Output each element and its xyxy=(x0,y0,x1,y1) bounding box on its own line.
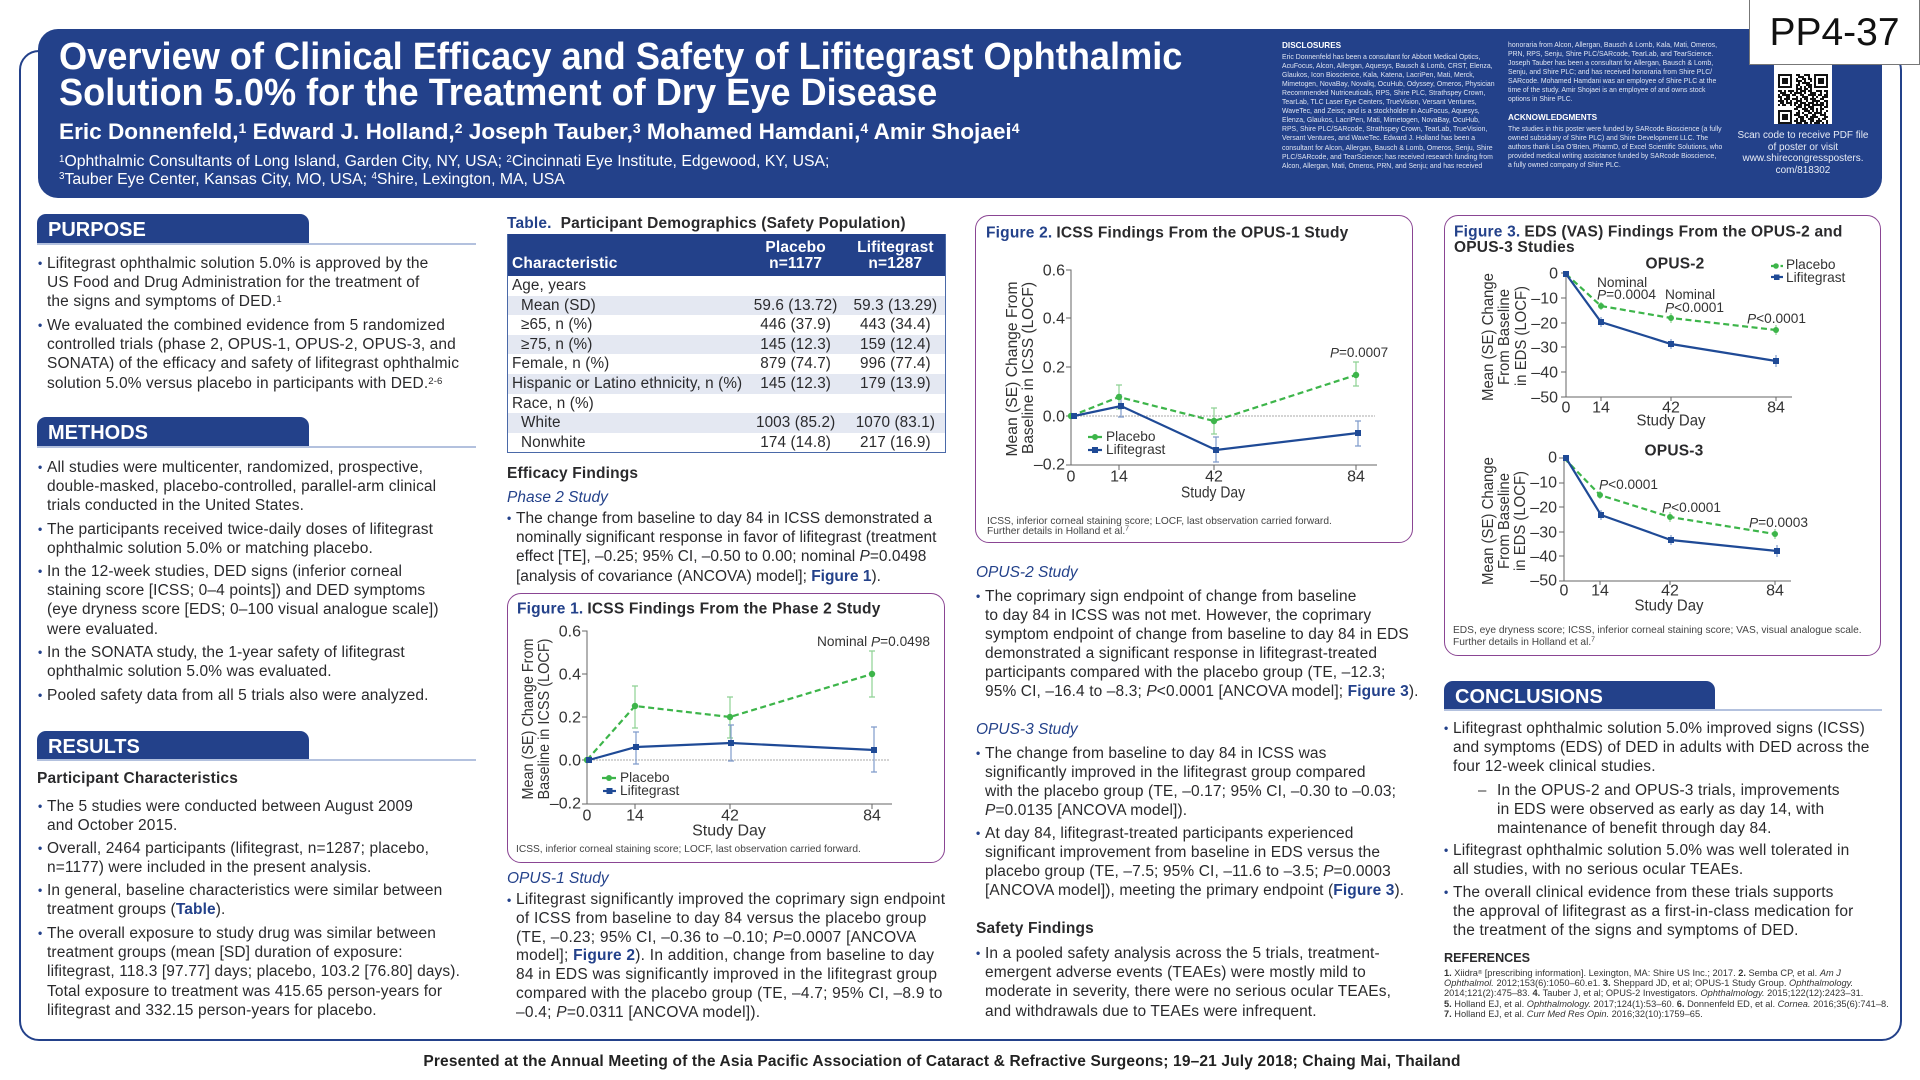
figure 2 line chart: 84 xyxy=(1348,469,1365,486)
opus-1 text xyxy=(507,891,945,1021)
figure 1 line chart: 0.2 xyxy=(559,710,582,727)
disclosures: RPS, Shire PLC/SARcode, Strathspey Crown, TearLab, TrueVision, xyxy=(1282,126,1487,133)
conclusions text: The overall clinical evidence from these trials supports xyxy=(1453,884,1834,901)
acknowledgments: ACKNOWLEDGMENTS The studies in this poster were funded by SARcode Bioscience (a fully xyxy=(1508,113,1722,133)
demographics table: 59.6 (13.72) xyxy=(754,297,837,314)
chart: OPUS-2: From Baseline xyxy=(1497,289,1514,385)
disclosures: AcuFocus, Alcon, Allergan, Aquesys, Bausch & Lomb, CRST, Elenza, xyxy=(1282,63,1493,70)
results text: and October 2015. xyxy=(47,817,177,834)
footer conference line: Presented at the Annual Meeting of the Asia Pacific Association of Cataract & Refractive Surgeons; 19–21 July 2018; Chaing Mai, Thailand xyxy=(423,1053,1461,1070)
panel: figure 3: Further details in Holland et al. xyxy=(1453,638,1592,649)
purpose text: • xyxy=(38,256,42,270)
opus-1 text: compared with the placebo group (TE, –4.7; 95% CI, –8.9 to xyxy=(516,985,943,1002)
chart: OPUS-2: Nominal xyxy=(1597,276,1648,291)
conclusions text: four 12-week clinical studies. xyxy=(1453,758,1656,775)
scan text: www.shirecongressposters. xyxy=(1743,153,1863,164)
results text: n=1177) were included in the present analysis. xyxy=(47,859,371,876)
disclosures: Glaukos, Icon Bioscience, Kala, Katena, LacriPen, Mati, Merck, xyxy=(1282,72,1475,79)
chart: OPUS-3: –40 xyxy=(1531,549,1558,566)
panel: figure 1 xyxy=(507,593,945,863)
purpose text xyxy=(38,255,459,392)
references text: 2014;121(2):475–83. 4. Tauber J, et al; OPUS-2 Investigators. Ophthalmology. 2015;122(12):2423–31. xyxy=(1444,988,1863,998)
efficacy findings heading: Efficacy Findings xyxy=(507,465,638,482)
opus-2 text: to day 84 in ICSS was not met. However, the coprimary xyxy=(985,607,1371,624)
chart: OPUS-3: 0 xyxy=(1548,450,1558,467)
conclusions text: and symptoms (EDS) of DED in adults with DED across the xyxy=(1453,739,1870,756)
figure 2 line chart: –0.2 xyxy=(1034,457,1066,474)
disclosures continued: honoraria from Alcon, Allergan, Bausch & Lomb, Kala, Mati, Omeros, xyxy=(1508,42,1717,49)
header banner xyxy=(38,29,1882,198)
conclusions text: maintenance of benefit through day 84. xyxy=(1497,820,1772,837)
disclosures xyxy=(1282,41,1495,170)
acknowledgments: owned subsidiary of Shire PLC) and Shire Development LLC. The xyxy=(1508,135,1708,142)
results text: Overall, 2464 participants (lifitegrast, n=1287; placebo, xyxy=(47,840,429,857)
opus-3 study heading: OPUS-3 Study xyxy=(976,721,1078,738)
participant characteristics heading: Participant Characteristics xyxy=(37,770,238,787)
references text: 1. Xiidra® [prescribing information]. Lexington, MA: Shire US Inc.; 2017. 2. Semba CP, et al. Am J xyxy=(1444,968,1841,978)
methods text: ophthalmic solution 5.0% or matching placebo. xyxy=(47,540,373,557)
conclusions text xyxy=(1444,720,1870,939)
results text xyxy=(38,798,460,1019)
opus-2 text: • xyxy=(976,589,980,603)
table title: Table. Participant Demographics (Safety Population) xyxy=(507,215,906,232)
safety text: and withdrawals due to TEAEs were infrequent. xyxy=(985,1003,1317,1020)
panel: figure 2: 7 xyxy=(1126,526,1130,533)
figure 2 legend xyxy=(1088,430,1166,458)
chart: OPUS-3: 0 xyxy=(1560,583,1569,600)
chart: OPUS-2: 14 xyxy=(1593,400,1610,417)
figure 1 legend: Lifitegrast xyxy=(620,784,680,799)
opus-2 study heading: OPUS-2 Study xyxy=(976,564,1078,581)
chart: OPUS-3: in EDS (LOCF) xyxy=(1513,471,1530,571)
disclosures: PLC/SARcode, and TearScience; has received research funding from xyxy=(1282,154,1493,161)
opus-3 text: • xyxy=(976,826,980,840)
figure 2 line chart: Mean (SE) Change From xyxy=(1005,282,1022,457)
demographics table: 174 (14.8) xyxy=(760,434,831,451)
opus-1 text: model]; Figure 2). In addition, change from baseline to day xyxy=(516,947,934,964)
disclosures: Versant Ventures, and WaveTec. Edward J. Holland has been a xyxy=(1282,135,1475,142)
figure 1 title: Figure 1. ICSS Findings From the Phase 2 Study xyxy=(517,601,881,618)
opus-1 text: of ICSS from baseline to day 84 versus the placebo group xyxy=(516,910,927,927)
conclusions text: • xyxy=(1444,885,1448,899)
figure 3 legend xyxy=(1771,258,1846,286)
figure 1 line chart: 0.4 xyxy=(559,667,582,684)
chart: OPUS-3: –20 xyxy=(1531,500,1558,517)
chart: OPUS-2: OPUS-2 xyxy=(1646,256,1705,273)
figure 1 line chart: 0.6 xyxy=(559,624,582,641)
chart: OPUS-3: 42 xyxy=(1662,583,1679,600)
chart: OPUS-2: Study Day xyxy=(1637,413,1706,430)
demographics table: 59.3 (13.29) xyxy=(854,297,937,314)
references text: 7. Holland EJ, et al. Curr Med Res Opin. 2016;32(10):1759–65. xyxy=(1444,1009,1703,1019)
figure 1 line chart: 0 xyxy=(583,808,592,825)
panel: figure 2 xyxy=(975,215,1413,543)
figure 1 line chart: Study Day xyxy=(692,823,766,840)
chart: OPUS-2: 84 xyxy=(1768,400,1785,417)
demographics table xyxy=(507,234,946,453)
demographics table: 159 (12.4) xyxy=(860,336,931,353)
opus-1 study heading: OPUS-1 Study xyxy=(507,870,609,887)
methods text: • xyxy=(38,645,42,659)
disclosures: Elenza, Glaukos, LacriPen, Mati, Mimetogen, NovaBay, OcuHub, xyxy=(1282,117,1480,124)
title: Overview of Clinical Efficacy and Safety of Lifitegrast Ophthalmic xyxy=(59,35,1182,78)
conclusions heading: CONCLUSIONS xyxy=(1455,686,1603,708)
results text: treatment groups (mean [SD] duration of exposure: xyxy=(47,944,403,961)
opus-3 text: The change from baseline to day 84 in ICSS was xyxy=(985,745,1327,762)
figure 2 line chart: 0.0 xyxy=(1043,409,1066,426)
chart: OPUS-2: Mean (SE) Change xyxy=(1481,273,1498,401)
opus-3 text xyxy=(976,745,1404,899)
figure 1 line chart: 14 xyxy=(627,808,644,825)
opus-1 text: • xyxy=(507,893,511,907)
disclosures: DISCLOSURES Eric Donnenfeld has been a consultant for Abbott Medical Optics, xyxy=(1282,41,1480,61)
purpose heading: PURPOSE xyxy=(48,219,146,241)
chart: OPUS-2: –40 xyxy=(1532,365,1558,382)
demographics table: 443 (34.4) xyxy=(860,316,931,333)
figure 2 legend: Placebo xyxy=(1106,430,1156,445)
phase 2 text xyxy=(507,510,936,585)
opus-3 text: [ANCOVA model]), meeting the primary endpoint (Figure 3). xyxy=(985,882,1404,899)
conclusions text: in EDS were observed as early as day 14, with xyxy=(1497,801,1824,818)
conclusions text: Lifitegrast ophthalmic solution 5.0% improved signs (ICSS) xyxy=(1453,720,1865,737)
opus-2 text xyxy=(976,588,1419,700)
disclosures: Mimetogen, NovaBay, Novaliq, OcuHub, Odyssey, Omeros, Physician xyxy=(1282,81,1495,88)
figure 1 line chart: Baseline in ICSS (LOCF) xyxy=(537,639,554,800)
conclusions text: all studies, with no serious ocular TEAEs. xyxy=(1453,861,1743,878)
methods text: In the SONATA study, the 1-year safety of lifitegrast xyxy=(47,644,405,661)
demographics table: Mean (SD) xyxy=(521,297,596,314)
demographics table: 145 (12.3) xyxy=(760,375,831,392)
purpose text: solution 5.0% versus placebo in participants with DED.2-6 xyxy=(47,375,442,392)
figure 3 legend: Placebo xyxy=(1786,258,1836,273)
phase 2 text: The change from baseline to day 84 in ICSS demonstrated a xyxy=(516,510,932,527)
safety text: moderate in severity, there were no serious ocular TEAEs, xyxy=(985,983,1391,1000)
opus-2 text: participants compared with the placebo group (TE, –12.3; xyxy=(985,664,1385,681)
disclosures: TearLab, TLC Laser Eye Centers, TrueVision, Versant Ventures, xyxy=(1282,99,1477,106)
disclosures: Recommended Nutriceuticals, RPS, Shire PLC, Strathspey Crown, xyxy=(1282,90,1485,97)
authors: Eric Donnenfeld,1 Edward J. Holland,2 Joseph Tauber,3 Mohamed Hamdani,4 Amir Shojaei4 xyxy=(59,119,1020,144)
chart: OPUS-2: Nominal xyxy=(1665,288,1716,303)
results text: lifitegrast, 118.3 [97.77] days; placebo, 103.2 [76.80] days). xyxy=(47,963,460,980)
methods text: ophthalmic solution 5.0% was evaluated. xyxy=(47,663,332,680)
demographics table: Characteristic xyxy=(512,254,617,272)
demographics table: 217 (16.9) xyxy=(860,434,931,451)
methods text: double-masked, placebo-controlled, parallel-arm clinical xyxy=(47,478,436,495)
figure 1 line chart: 84 xyxy=(864,808,881,825)
demographics table: Placebo xyxy=(765,239,826,256)
demographics table: Hispanic or Latino ethnicity, n (%) xyxy=(512,375,742,392)
demographics table: ≥75, n (%) xyxy=(521,336,592,353)
panel: figure 3: 7 xyxy=(1592,637,1596,644)
phase 2 text: • xyxy=(507,511,511,525)
chart: OPUS-2 xyxy=(1481,256,1806,430)
opus-2 text: demonstrated a significant response in lifitegrast-treated xyxy=(985,645,1377,662)
figure 2 line chart: 0 xyxy=(1067,469,1076,486)
opus-1 text: Lifitegrast significantly improved the coprimary sign endpoint xyxy=(516,891,945,908)
conclusions text: • xyxy=(1444,843,1448,857)
demographics table: 179 (13.9) xyxy=(860,375,931,392)
disclosures continued: time of the study. Amir Shojaei is an employee of and owns stock xyxy=(1508,87,1705,94)
chart: OPUS-3: OPUS-3 xyxy=(1645,443,1704,460)
disclosures continued: PRN, RPS, Senju, Shire PLC/SARcode, TearLab, and TearScience. xyxy=(1508,51,1713,58)
opus-2 text: The coprimary sign endpoint of change from baseline xyxy=(985,588,1356,605)
figure 2 title: Figure 2. ICSS Findings From the OPUS-1 Study xyxy=(986,225,1349,242)
methods text: trials conducted in the United States. xyxy=(47,497,304,514)
disclosures: Alcon, Allergan, Mati, Omeros, PRN, and Senju; and has received xyxy=(1282,163,1482,170)
results text: The overall exposure to study drug was similar between xyxy=(47,925,436,942)
figure 3 footnote: EDS, eye dryness score; ICSS, inferior corneal staining score; VAS, visual analogue scale. xyxy=(1453,626,1862,637)
results text: • xyxy=(38,883,42,897)
conclusions text: – xyxy=(1478,782,1486,799)
methods heading: METHODS xyxy=(48,422,148,444)
purpose text: the signs and symptoms of DED.1 xyxy=(47,293,282,310)
disclosures: WaveTec, and Zeiss; and is a stockholder in AcuFocus, Aquesys, xyxy=(1282,108,1480,115)
figure 2 line chart: P=0.0007 xyxy=(1330,345,1389,360)
figure 2 legend: Lifitegrast xyxy=(1106,443,1166,458)
opus-3 text: with the placebo group (TE, –0.17; 95% CI, –0.30 to –0.03; xyxy=(985,783,1396,800)
safety text: In a pooled safety analysis across the 5 trials, treatment- xyxy=(985,945,1380,962)
figure 3 legend: Lifitegrast xyxy=(1786,271,1846,286)
purpose text: SONATA) of the efficacy and safety of lifitegrast ophthalmic xyxy=(47,355,459,372)
phase 2 study heading: Phase 2 Study xyxy=(507,489,608,506)
purpose heading xyxy=(37,214,309,243)
figure 2 line chart: Baseline in ICSS (LOCF) xyxy=(1021,282,1038,454)
methods text: In the 12-week studies, DED signs (inferior corneal xyxy=(47,563,402,580)
methods text: All studies were multicenter, randomized, prospective, xyxy=(47,459,423,476)
results heading xyxy=(37,731,309,760)
figure 2 line chart: 42 xyxy=(1206,469,1223,486)
demographics table: Female, n (%) xyxy=(512,355,609,372)
results text: • xyxy=(38,799,42,813)
methods text: • xyxy=(38,460,42,474)
figure 2 footnote: ICSS, inferior corneal staining score; LOCF, last observation carried forward. xyxy=(987,517,1332,528)
title: Solution 5.0% for the Treatment of Dry Eye Disease xyxy=(59,71,937,114)
conclusions text: Lifitegrast ophthalmic solution 5.0% was well tolerated in xyxy=(1453,842,1849,859)
poster number box xyxy=(1749,0,1920,65)
references text: Ophthalmol. 2012;153(6):1050–60.e1. 3. Sheppard JD, et al; OPUS-1 Study Group. Ophthalmology. xyxy=(1444,978,1853,988)
opus-3 text: placebo group (TE, –7.5; 95% CI, –11.6 to –3.5; P=0.0003 xyxy=(985,863,1391,880)
poster number box: PP4-37 xyxy=(1769,11,1900,54)
methods text: The participants received twice-daily doses of lifitegrast xyxy=(47,521,433,538)
chart: OPUS-3: P=0.0003 xyxy=(1749,516,1809,531)
figure 3 title: Figure 3. EDS (VAS) Findings From the OPUS-2 and xyxy=(1454,224,1843,241)
methods text: • xyxy=(38,522,42,536)
purpose text: US Food and Drug Administration for the treatment of xyxy=(47,274,419,291)
methods text: staining score [ICSS; 0–4 points]) and DED symptoms xyxy=(47,582,425,599)
chart: OPUS-3: From Baseline xyxy=(1497,473,1514,569)
acknowledgments: authors thank Lisa O’Brien, PharmD, of Excel Scientific Solutions, who xyxy=(1508,144,1722,151)
safety text: emergent adverse events (TEAEs) were mostly mild to xyxy=(985,964,1366,981)
chart: OPUS-3 xyxy=(1481,443,1809,615)
phase 2 text: [analysis of covariance (ANCOVA) model]; Figure 1). xyxy=(516,568,881,585)
purpose text: • xyxy=(38,318,42,332)
chart: OPUS-2: in EDS (LOCF) xyxy=(1514,286,1531,386)
chart: OPUS-3: P<0.0001 xyxy=(1662,501,1721,516)
opus-3 text: At day 84, lifitegrast-treated participants experienced xyxy=(985,825,1353,842)
figure 1 line chart: Mean (SE) Change From xyxy=(521,639,538,800)
chart: OPUS-2: P=0.0004 xyxy=(1597,288,1657,303)
demographics table: n=1177 xyxy=(769,254,822,272)
acknowledgments: provided medical writing assistance funded by SARcode Bioscience, xyxy=(1508,153,1716,160)
opus-2 text: 95% CI, –16.4 to –8.3; P<0.0001 [ANCOVA model]; Figure 3). xyxy=(985,683,1419,700)
conclusions text: the treatment of the signs and symptoms of DED. xyxy=(1453,922,1799,939)
opus-1 text: 84 in EDS was significantly improved in the lifitegrast group xyxy=(516,966,937,983)
conclusions text: • xyxy=(1444,721,1448,735)
demographics table: Lifitegrast xyxy=(857,239,934,256)
chart: OPUS-2: 42 xyxy=(1663,400,1680,417)
chart: OPUS-2: 0 xyxy=(1562,400,1571,417)
figure 2 line chart: 14 xyxy=(1111,469,1128,486)
disclosures continued xyxy=(1508,42,1717,103)
affiliations xyxy=(59,153,829,188)
figure 2 line chart: Study Day xyxy=(1181,485,1245,502)
figure 2 line chart: 0.6 xyxy=(1043,263,1066,280)
figure 1 line chart: 42 xyxy=(722,808,739,825)
demographics table: 879 (74.7) xyxy=(760,355,831,372)
results text: • xyxy=(38,841,42,855)
disclosures continued: SARcode. Mohamed Hamdani was an employee of Shire PLC at the xyxy=(1508,78,1716,85)
methods text xyxy=(38,459,439,704)
chart: OPUS-2: P<0.0001 xyxy=(1747,312,1806,327)
demographics table: White xyxy=(521,414,561,431)
results text: lifitegrast and 332.15 person-years for placebo. xyxy=(47,1002,377,1019)
acknowledgments xyxy=(1508,113,1722,169)
opus-3 text: • xyxy=(976,746,980,760)
demographics table: 1070 (83.1) xyxy=(856,414,935,431)
demographics table: Race, n (%) xyxy=(512,395,594,412)
chart: OPUS-2: –30 xyxy=(1532,340,1558,357)
purpose text: Lifitegrast ophthalmic solution 5.0% is approved by the xyxy=(47,255,428,272)
figure 1 legend xyxy=(602,771,680,799)
panel: figure 3 xyxy=(1444,215,1881,656)
demographics table: n=1287 xyxy=(868,254,922,272)
purpose text: controlled trials (phase 2, OPUS-1, OPUS-2, OPUS-3, and xyxy=(47,336,456,353)
figure 1 line chart: –0.2 xyxy=(550,796,582,813)
figure 1 footnote: ICSS, inferior corneal staining score; LOCF, last observation carried forward. xyxy=(516,845,861,856)
results text: • xyxy=(38,926,42,940)
scan text: of poster or visit xyxy=(1768,142,1838,152)
chart: OPUS-3: –30 xyxy=(1531,525,1558,542)
methods text: • xyxy=(38,688,42,702)
panel: figure 3: OPUS-3 Studies xyxy=(1454,240,1575,256)
figure 1 line chart xyxy=(521,624,931,840)
affiliations: 1Ophthalmic Consultants of Long Island, Garden City, NY, USA; 2Cincinnati Eye Institute, Edgewood, KY, USA; xyxy=(59,153,829,170)
opus-1 text: (TE, –0.23; 95% CI, –0.36 to –0.10; P=0.0007 [ANCOVA xyxy=(516,929,916,946)
QR code xyxy=(1774,65,1832,124)
chart: OPUS-3: –10 xyxy=(1531,475,1558,492)
safety findings heading: Safety Findings xyxy=(976,920,1094,937)
chart: OPUS-2: –10 xyxy=(1532,291,1558,308)
title xyxy=(59,35,1182,114)
methods text: Pooled safety data from all 5 trials also were analyzed. xyxy=(47,687,428,704)
scan text: com/818302 xyxy=(1776,164,1830,176)
results text: In general, baseline characteristics were similar between xyxy=(47,882,442,899)
safety text xyxy=(976,945,1391,1020)
references heading: REFERENCES xyxy=(1444,951,1530,965)
chart: OPUS-3: 14 xyxy=(1592,583,1609,600)
references text xyxy=(1444,968,1889,1019)
phase 2 text: nominally significant response in favor of lifitegrast (treatment xyxy=(516,529,936,546)
panel: figure 2: Further details in Holland et al. xyxy=(987,527,1126,538)
methods text: (eye dryness score [EDS; 0–100 visual analogue scale]) xyxy=(47,601,439,618)
figure 2 line chart: 0.4 xyxy=(1043,311,1066,328)
scan text: Scan code to receive PDF file xyxy=(1738,130,1868,141)
references text: 5. Holland EJ, et al. Ophthalmology. 2017;124(1):53–60. 6. Donnenfeld ED, et al. Cornea. 2016;35(6):741–8. xyxy=(1444,999,1889,1009)
demographics table: 145 (12.3) xyxy=(760,336,831,353)
opus-3 text: significantly improved in the lifitegrast group compared xyxy=(985,764,1366,781)
figure 1 line chart: Nominal P=0.0498 xyxy=(817,635,931,650)
results text: The 5 studies were conducted between August 2009 xyxy=(47,798,413,815)
figure 1 line chart: 0.0 xyxy=(559,753,582,770)
demographics table: 996 (77.4) xyxy=(860,355,931,372)
conclusions heading xyxy=(1444,681,1715,710)
chart: OPUS-3: Study Day xyxy=(1635,598,1704,615)
safety text: • xyxy=(976,946,980,960)
acknowledgments: a fully owned company of Shire PLC. xyxy=(1508,162,1621,169)
figure 2 line chart: 0.2 xyxy=(1043,360,1066,377)
figure 2 line chart xyxy=(1005,263,1389,502)
conclusions text: the approval of lifitegrast as a first-in-class medication for xyxy=(1453,903,1853,920)
phase 2 text: effect [TE], –0.25; 95% CI, –0.50 to 0.00; nominal P=0.0498 xyxy=(516,548,926,565)
disclosures: consultant for Alcon, Allergan, Bausch & Lomb, Omeros, Senju, Shire xyxy=(1282,145,1493,152)
demographics table: ≥65, n (%) xyxy=(521,316,592,333)
opus-3 text: P=0.0135 [ANCOVA model]). xyxy=(985,802,1187,819)
purpose text: We evaluated the combined evidence from 5 randomized xyxy=(47,317,445,334)
demographics table: 446 (37.9) xyxy=(760,316,831,333)
chart: OPUS-3: –50 xyxy=(1531,573,1558,590)
chart: OPUS-2: –50 xyxy=(1532,390,1558,407)
disclosures continued: options in Shire PLC. xyxy=(1508,96,1573,103)
opus-1 text: –0.4; P=0.0311 [ANCOVA model]). xyxy=(516,1004,760,1021)
figure 1 legend: Placebo xyxy=(620,771,670,786)
demographics table: Age, years xyxy=(512,277,586,294)
chart: OPUS-2: 0 xyxy=(1550,266,1558,283)
demographics table: Nonwhite xyxy=(521,434,586,451)
chart: OPUS-3: 84 xyxy=(1767,583,1784,600)
results text: treatment groups (Table). xyxy=(47,901,225,918)
disclosures continued: Senju, and Shire PLC; and has received honoraria from Shire PLC/ xyxy=(1508,69,1712,76)
opus-3 text: significant improvement from baseline in EDS versus the xyxy=(985,844,1380,861)
methods heading xyxy=(37,417,309,446)
demographics table: 1003 (85.2) xyxy=(756,414,835,431)
chart: OPUS-3: Mean (SE) Change xyxy=(1481,457,1498,585)
affiliations: 3Tauber Eye Center, Kansas City, MO, USA; 4Shire, Lexington, MA, USA xyxy=(59,170,565,188)
disclosures continued: Joseph Tauber has been a consultant for Allergan, Bausch & Lomb, xyxy=(1508,60,1713,67)
methods text: were evaluated. xyxy=(47,621,158,638)
chart: OPUS-2: P<0.0001 xyxy=(1665,301,1724,316)
results text: Total exposure to treatment was 415.65 person-years for xyxy=(47,983,442,1000)
methods text: • xyxy=(38,564,42,578)
chart: OPUS-2: –20 xyxy=(1532,316,1558,333)
conclusions text: In the OPUS-2 and OPUS-3 trials, improvements xyxy=(1497,782,1840,799)
scan text xyxy=(1738,130,1868,176)
chart: OPUS-3: P<0.0001 xyxy=(1599,478,1658,493)
opus-2 text: symptom endpoint of change from baseline to day 84 in EDS xyxy=(985,626,1409,643)
results heading: RESULTS xyxy=(48,736,140,758)
